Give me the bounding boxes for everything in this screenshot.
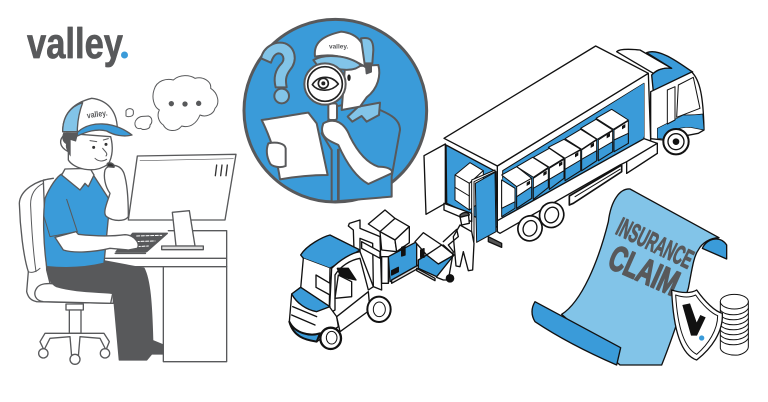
desk <box>103 211 227 362</box>
thought bubble <box>126 76 218 131</box>
blue polo shirt <box>44 174 110 268</box>
illustration: delivery truck <box>424 46 704 247</box>
forklift wheels <box>320 297 391 349</box>
logo: valley: valley <box>27 20 123 68</box>
question mark <box>261 43 295 103</box>
truck cab <box>617 49 704 154</box>
magnifier handle <box>328 103 337 120</box>
typing arm <box>55 232 138 252</box>
office chair <box>19 178 113 364</box>
blue circle background <box>244 19 427 202</box>
raised forearm <box>104 165 128 220</box>
computer monitor <box>128 154 236 220</box>
rear wheels <box>514 198 568 245</box>
paper sheet <box>262 113 328 179</box>
collar <box>62 168 94 190</box>
walking worker <box>437 212 474 282</box>
illustration: insurance claim scroll <box>532 189 748 365</box>
arm <box>322 121 392 184</box>
hand holding paper <box>267 143 286 167</box>
scroll heading <box>603 212 698 304</box>
chassis, tank and side rail <box>497 139 657 233</box>
roof <box>444 46 648 166</box>
row of cargo boxes <box>502 109 628 217</box>
baseball cap <box>63 98 132 136</box>
illustration: worker thinking at desk <box>19 76 236 364</box>
shield with v <box>672 290 722 360</box>
scroll heading: INSURANCE <box>612 212 698 275</box>
dark trousers <box>47 261 163 360</box>
bottom roll <box>532 302 621 365</box>
scroll heading: CLAIM <box>603 238 685 304</box>
blue roof cab <box>301 235 373 313</box>
top roll inner <box>702 239 727 259</box>
magnifier lens <box>304 63 346 105</box>
engine body <box>289 287 370 342</box>
scroll sheet <box>562 189 719 365</box>
pallet boxes on forks <box>368 210 454 283</box>
worker figure <box>44 98 163 360</box>
badge: inspector with magnifying glass <box>244 19 427 202</box>
rear opening and stacked boxes <box>424 144 502 247</box>
head <box>61 133 112 170</box>
baseball cap: valley. <box>86 108 108 120</box>
vertical strap <box>334 150 342 200</box>
illustration: forklift with pallet and worker <box>289 210 474 349</box>
forklift mast <box>348 220 388 290</box>
cargo side and interior <box>497 73 651 227</box>
inspector figure <box>304 32 400 202</box>
inspector figure: valley. <box>329 43 348 50</box>
coin stack <box>720 294 748 355</box>
